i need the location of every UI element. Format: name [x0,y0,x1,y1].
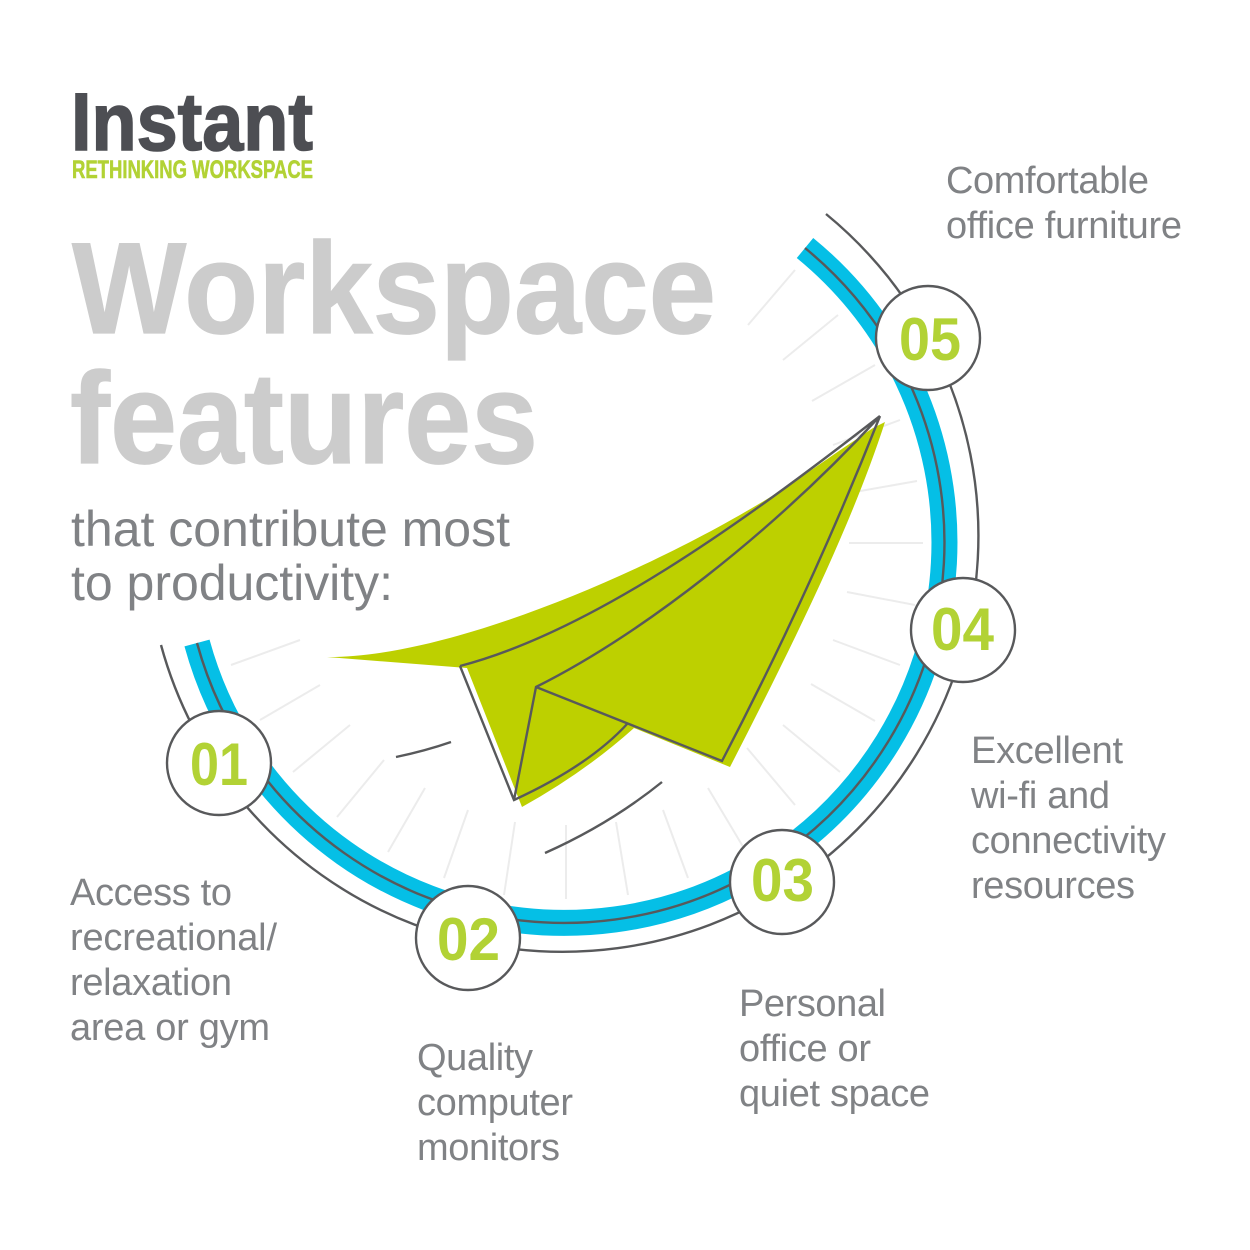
label 02: computer [417,1082,573,1124]
label 02: Quality [417,1037,533,1079]
logo: Instant [71,77,313,168]
label 01: relaxation [70,962,232,1004]
node 04: 04 [931,596,995,663]
label 04: resources [971,865,1135,907]
node 01: 01 [190,731,248,798]
title: features [70,345,538,491]
label 03 [739,983,930,1115]
node 05 [876,286,980,390]
label 05: office furniture [946,205,1182,247]
label 04: Excellent [971,730,1123,772]
label 05: Comfortable [946,160,1149,202]
label 04: wi-fi and [970,775,1110,817]
node 02: 02 [437,906,500,973]
paper plane [327,416,885,807]
node 03 [730,830,834,934]
label 03: office or [739,1028,871,1070]
inner dark arc [197,248,944,923]
label 01 [70,872,277,1049]
label 02 [417,1037,573,1169]
node 03: 03 [751,847,814,914]
label 01: recreational/ [70,917,277,959]
blue progress ring [197,248,944,923]
node 02 [416,886,520,990]
plane outline [460,416,880,800]
title [70,215,716,491]
speed line: upper [396,742,451,757]
label 03: quiet space [739,1073,930,1115]
label 01: Access to [70,872,232,914]
outer thin arc [161,214,978,952]
subtitle: to productivity: [71,555,393,611]
node 05: 05 [899,306,961,373]
label 05 [946,160,1182,247]
label 01: area or gym [70,1007,270,1049]
label 02: monitors [417,1127,560,1169]
label 04: connectivity [971,820,1166,862]
logo: RETHINKING WORKSPACE [72,156,313,184]
plane fill [327,422,885,807]
node 01 [167,711,271,815]
label 03: Personal [739,983,886,1025]
speed line: lower [545,782,662,853]
subtitle [71,501,510,611]
radial spokes [231,270,923,899]
subtitle: that contribute most [71,501,510,557]
label 04 [970,730,1166,907]
node 04 [911,578,1015,682]
title: Workspace [72,215,716,361]
